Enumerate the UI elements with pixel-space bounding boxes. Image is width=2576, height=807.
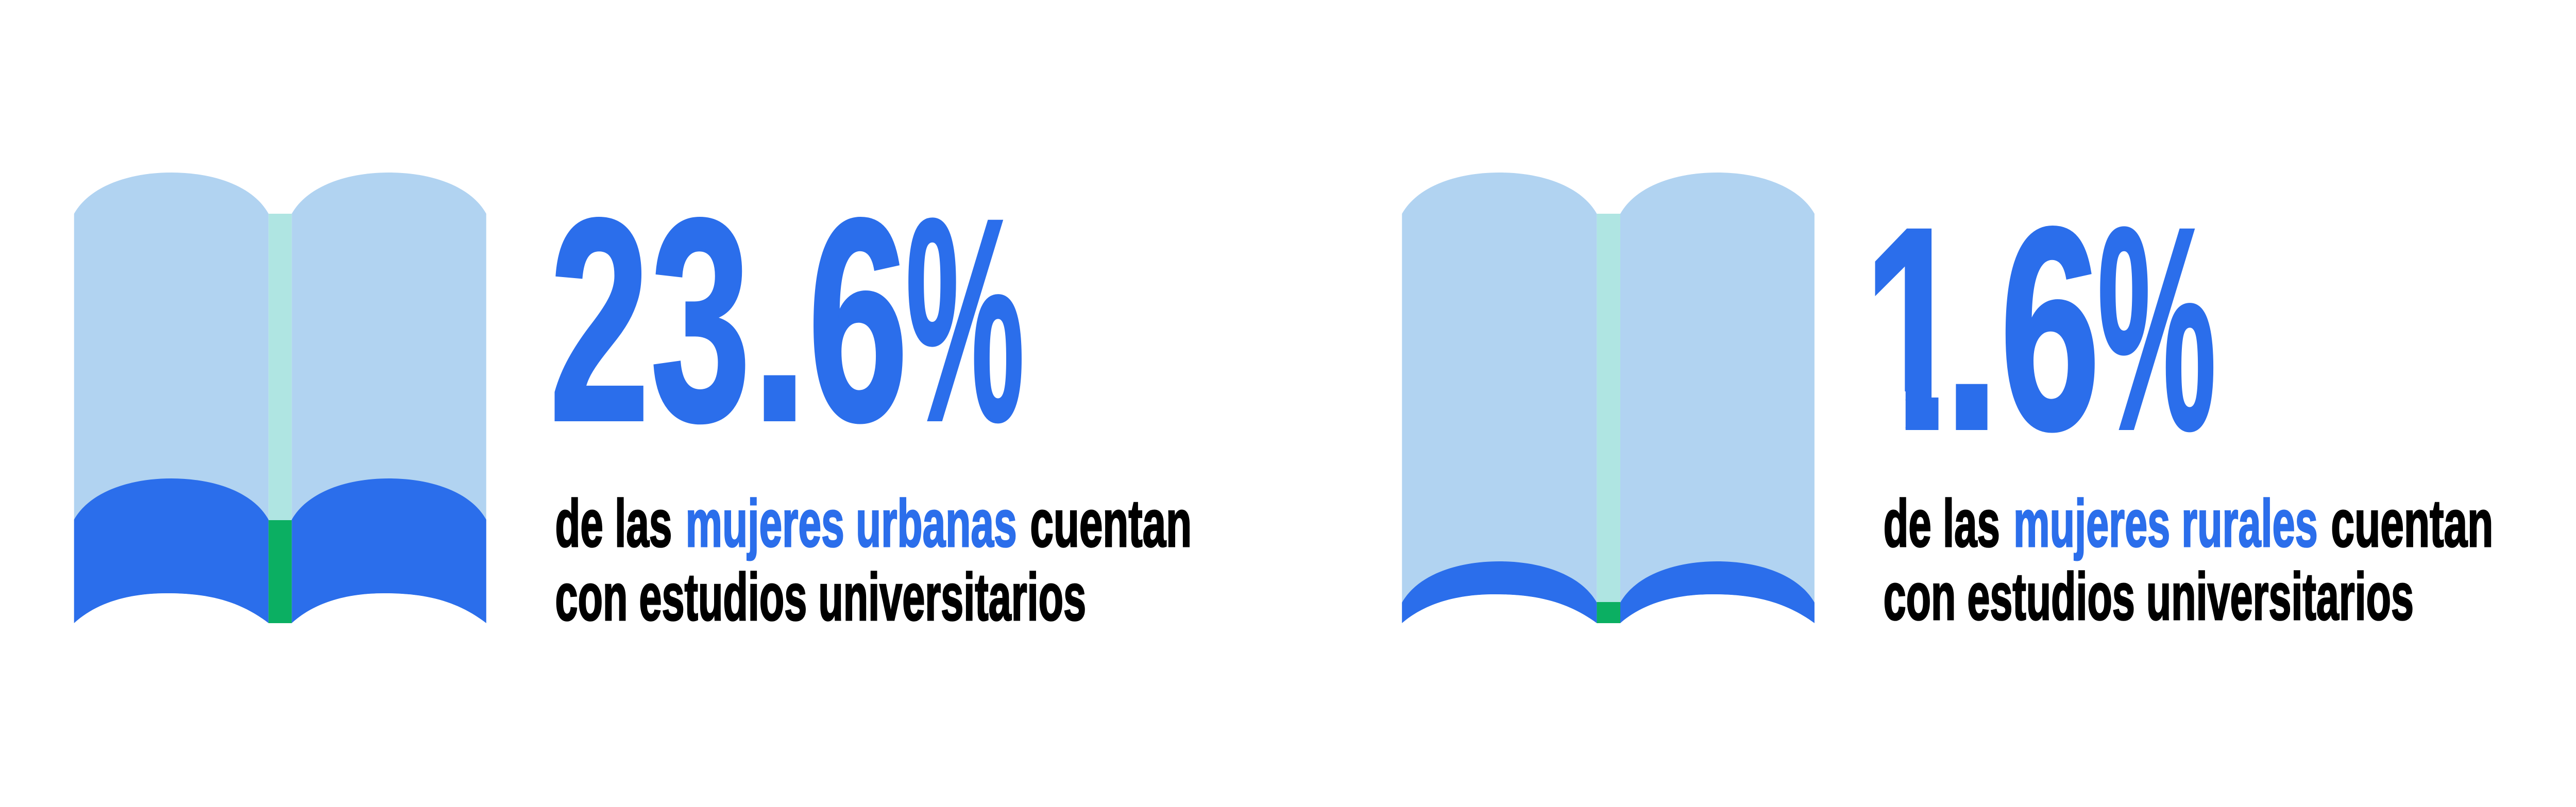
filled spine (268, 520, 292, 623)
stat number 23.6% (549, 176, 1032, 433)
page bottom cutout (1402, 594, 1815, 626)
icon: open book 23.6% filled (74, 173, 486, 626)
infographic (74, 173, 2492, 623)
caption: de las (555, 486, 672, 561)
book spine (1597, 214, 1620, 603)
caption: mujeres urbanas (686, 486, 1017, 561)
caption: cuentan (2331, 486, 2493, 561)
book spine (268, 214, 292, 520)
caption: mujeres rurales (2013, 486, 2318, 561)
book pages background (74, 173, 486, 623)
filled pages (1402, 561, 1815, 623)
caption: con estudios universitarios (555, 559, 1086, 634)
book pages background (1402, 173, 1815, 623)
page bottom cutout (74, 593, 486, 626)
caption: cuentan (1030, 486, 1192, 561)
panel: mujeres rurales (1402, 173, 2505, 634)
filled pages (74, 478, 486, 623)
panel: mujeres urbanas (74, 173, 1204, 634)
caption: de las (1884, 486, 2000, 561)
filled spine (1597, 602, 1620, 623)
stat number 1.6% (1875, 226, 2213, 433)
caption: con estudios universitarios (1884, 559, 2414, 634)
icon: open book 1.6% filled (1402, 173, 1815, 626)
